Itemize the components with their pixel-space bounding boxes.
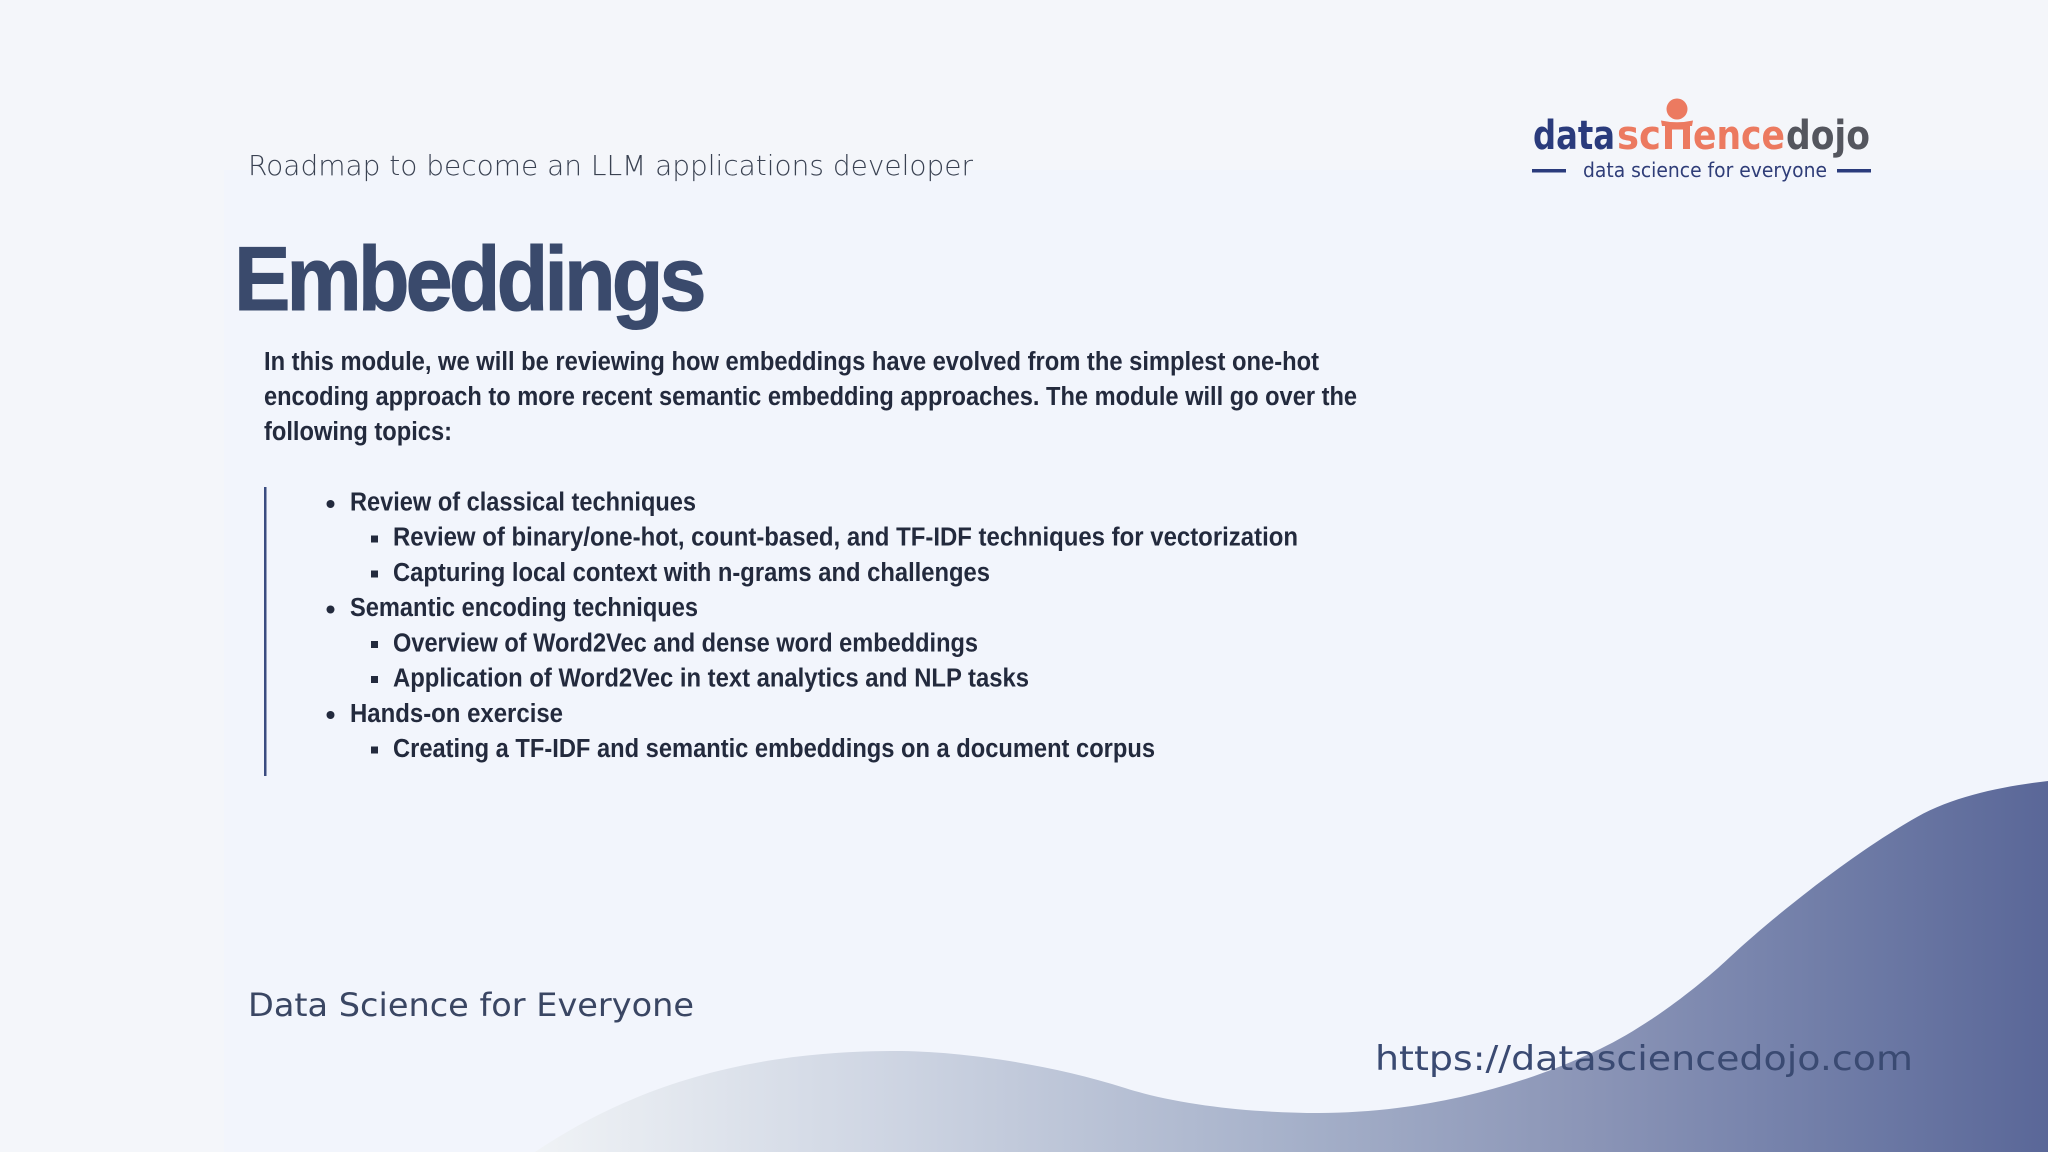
- footer tagline: Data Science for Everyone: [248, 986, 694, 1024]
- bullet: classical techniques: [326, 488, 1298, 587]
- intro paragraph: encoding approach to more recent semantic embedding approaches. The module will go over the: [264, 383, 1357, 411]
- subtitle: Roadmap to become an LLM applications developer: [248, 149, 973, 182]
- logo: sc: [1617, 113, 1661, 159]
- intro paragraph: [264, 348, 1357, 446]
- logo: ence: [1693, 113, 1785, 159]
- topic list: [326, 488, 1298, 763]
- bullet: hands-on exercise: [326, 700, 1155, 763]
- bullet: hands-on exercise: Creating a TF-IDF and semantic embeddings on a document corpus: [393, 735, 1155, 763]
- bullet: classical techniques: Review of classical techniques: [350, 488, 696, 516]
- logo: data science for everyone: [1583, 158, 1827, 182]
- icon: torii figure: [1661, 98, 1693, 149]
- logo: dojo: [1786, 113, 1870, 159]
- quote rule: [264, 487, 266, 776]
- bullet: semantic encoding: Overview of Word2Vec and dense word embeddings: [393, 630, 978, 658]
- bullet: hands-on exercise: Hands-on exercise: [350, 700, 563, 728]
- bullet: classical techniques: Review of binary/one-hot, count-based, and TF-IDF techniques for vectorization: [393, 524, 1298, 552]
- intro paragraph: following topics:: [264, 418, 452, 446]
- intro paragraph: In this module, we will be reviewing how embeddings have evolved from the simplest one-hot: [264, 348, 1319, 376]
- title: Embeddings: [234, 227, 704, 330]
- bullet: classical techniques: Capturing local context with n-grams and challenges: [393, 559, 990, 587]
- bullet: semantic encoding: Application of Word2Vec in text analytics and NLP tasks: [393, 664, 1029, 692]
- bullet: semantic encoding: Semantic encoding techniques: [350, 594, 698, 622]
- bullet: semantic encoding: [326, 594, 1029, 692]
- logo: data: [1533, 113, 1615, 159]
- decorative wave: [535, 781, 2048, 1152]
- footer url: https://datasciencedojo.com: [1375, 1039, 1913, 1079]
- logo: [1532, 98, 1871, 182]
